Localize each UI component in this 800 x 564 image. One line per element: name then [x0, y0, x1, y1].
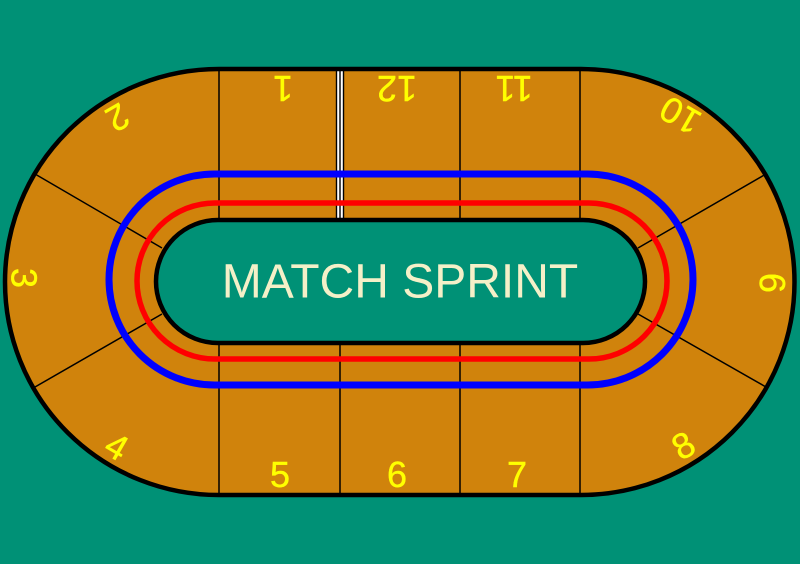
- number 7: 7: [507, 454, 527, 495]
- number 3: 3: [4, 268, 44, 288]
- sector numbers: [4, 68, 793, 495]
- sector lines: [35, 69, 766, 495]
- number 10: 10: [653, 88, 708, 143]
- title: MATCH SPRINT: [222, 256, 578, 308]
- number 5: 5: [270, 454, 290, 495]
- number 6: 6: [387, 454, 407, 495]
- number 2: 2: [99, 95, 137, 140]
- red sprinters line: [137, 203, 667, 359]
- blue stayers line: [109, 174, 693, 385]
- number 8: 8: [664, 423, 702, 468]
- number 4: 4: [98, 424, 136, 469]
- track inner edge: [156, 220, 645, 343]
- track surface: [5, 69, 794, 495]
- finish line: [336, 69, 344, 220]
- number 12: 12: [377, 68, 417, 109]
- number 9: 9: [752, 273, 793, 293]
- number 11: 11: [495, 68, 533, 109]
- track outer edge: [5, 69, 794, 495]
- number 1: 1: [273, 68, 293, 109]
